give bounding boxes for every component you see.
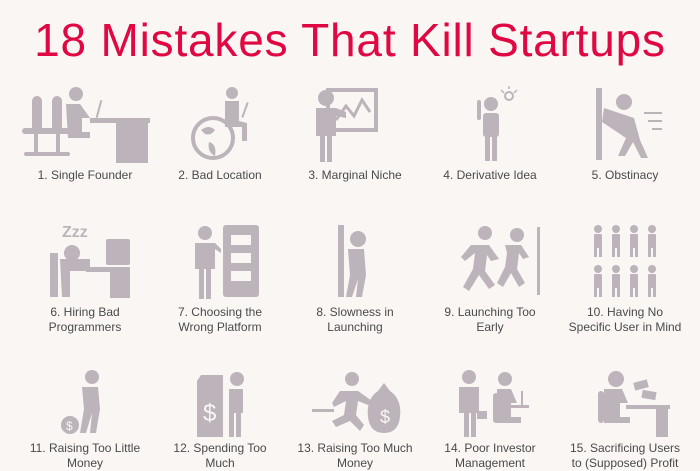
item 11 <box>30 370 140 470</box>
item 15 <box>570 371 680 470</box>
icon: investor and founder <box>459 370 529 437</box>
item 14: 14. Poor Investor <box>444 441 536 455</box>
item 15: 15. Sacrificing Users <box>570 441 680 455</box>
item 9 <box>444 226 540 334</box>
icon: running with big money bag <box>312 372 400 433</box>
icon: running with big money bag: $ <box>380 407 390 427</box>
item 15: to (Supposed) Profit <box>572 456 678 470</box>
item 3: marginal niche <box>308 88 402 182</box>
item 2: bad location <box>178 87 262 182</box>
item 7: Wrong Platform <box>178 320 262 334</box>
icon: presenter with chart <box>316 88 378 162</box>
item 5: obstinacy <box>592 88 662 182</box>
item 12 <box>173 372 267 470</box>
item 8: 8. Slowness in <box>316 305 394 319</box>
item 11: Money <box>67 456 103 470</box>
item 10: 10. Having No <box>587 305 663 319</box>
item 1: single founder <box>22 87 150 182</box>
item 10 <box>569 225 681 334</box>
item 4: derivative idea: 4. Derivative Idea <box>443 168 537 182</box>
icon: runners <box>461 226 540 295</box>
title: 18 Mistakes That Kill Startups <box>34 14 666 66</box>
icon: sleeping at desk <box>50 224 130 298</box>
item 5: obstinacy: 5. Obstinacy <box>592 168 658 182</box>
item 6 <box>49 224 130 334</box>
item 14: Management <box>455 456 525 470</box>
item 6: 6. Hiring Bad <box>50 305 120 319</box>
item 11: 11. Raising Too Little <box>30 441 140 455</box>
icon: person with server <box>195 225 259 299</box>
icon: crowd of people <box>594 225 656 297</box>
icon: ATM <box>197 372 244 437</box>
icon: person at desk with money <box>598 371 670 437</box>
item 10: Specific User in Mind <box>569 320 681 334</box>
item 2: bad location: 2. Bad Location <box>178 168 262 182</box>
item 14 <box>444 370 536 470</box>
icon: person pushing wall <box>596 88 662 160</box>
item 13: 13. Raising Too Much <box>297 441 413 455</box>
item 3: marginal niche: 3. Marginal Niche <box>308 168 402 182</box>
icon: globe with person <box>191 87 248 160</box>
item 8: Launching <box>327 320 383 334</box>
item 7 <box>178 225 262 334</box>
icon: person with lightbulb <box>477 86 518 161</box>
icon: person with small money bag: $ <box>66 419 73 433</box>
icon: desk and chairs <box>22 87 150 163</box>
item 7: 7. Choosing the <box>178 305 262 319</box>
item 9: Early <box>476 320 504 334</box>
item 13 <box>297 372 413 470</box>
item 12: 12. Spending Too <box>173 441 267 455</box>
icon: ATM: $ <box>203 400 216 427</box>
item 9: 9. Launching Too <box>444 305 536 319</box>
icon: leaning person <box>338 225 366 297</box>
item 13: Money <box>337 456 373 470</box>
icon: sleeping at desk: Zzz <box>62 224 88 241</box>
item 1: single founder: 1. Single Founder <box>38 168 132 182</box>
icon: person with small money bag <box>61 370 100 434</box>
item 4: derivative idea <box>443 86 537 182</box>
item 8 <box>316 225 394 334</box>
item 6: Programmers <box>49 320 121 334</box>
item 12: Much <box>205 456 235 470</box>
